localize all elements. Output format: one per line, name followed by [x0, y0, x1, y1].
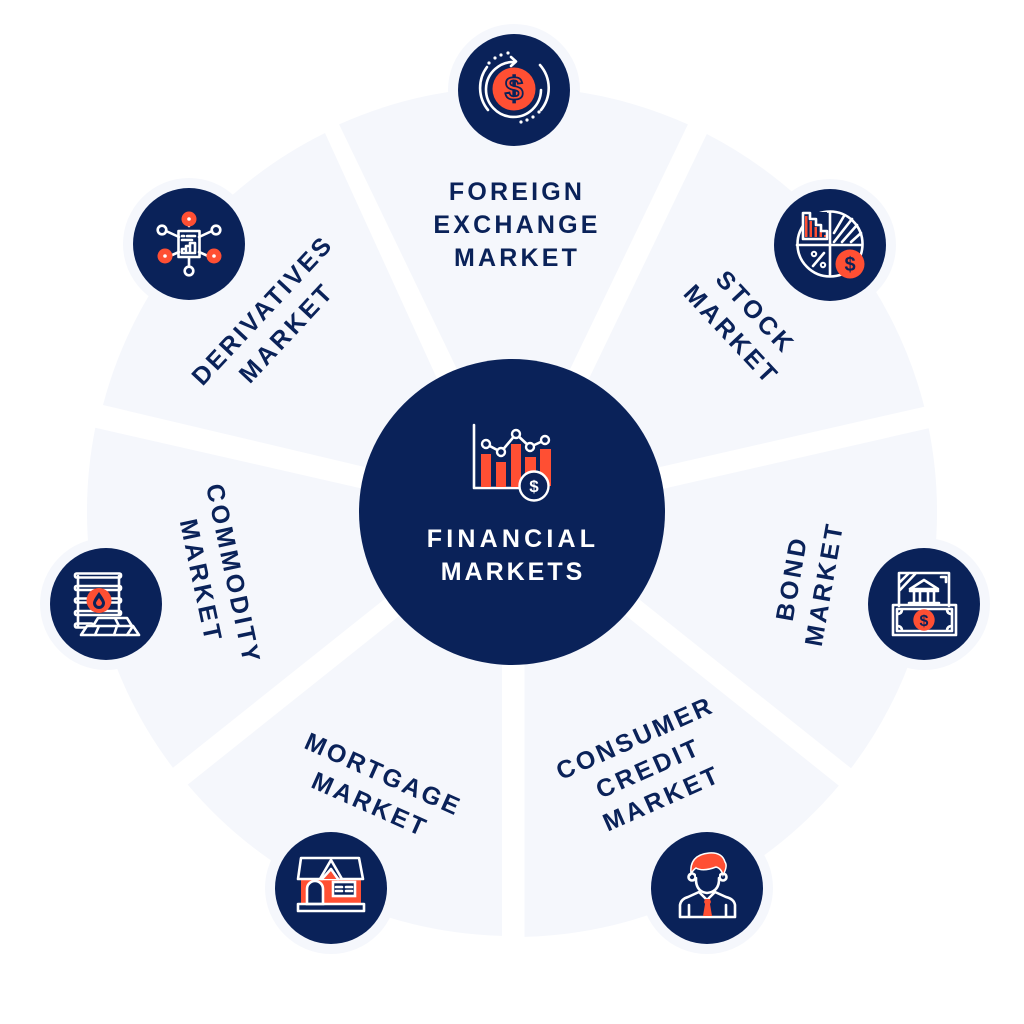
icon: stock market	[764, 179, 896, 311]
sector: stock market	[424, 111, 954, 633]
label: derivatives market: MARKET	[234, 277, 340, 389]
icon: derivatives	[123, 178, 255, 310]
sector: bond market	[498, 348, 965, 777]
label: commodity market: MARKET	[174, 517, 227, 646]
icon: stock market: $	[844, 254, 856, 276]
label: bond market: MARKET	[800, 519, 849, 648]
icon: mortgage	[265, 822, 397, 954]
label: foreign exchange market: EXCHANGE	[433, 211, 601, 239]
label: stock market	[678, 257, 809, 391]
label: mortgage market: MORTGAGE	[300, 728, 466, 822]
label: consumer credit market	[552, 691, 745, 846]
label: commodity market	[168, 481, 266, 674]
icon: bond market	[858, 538, 990, 670]
icon: foreign exchange	[448, 24, 580, 156]
label: consumer credit market: CONSUMER	[552, 691, 719, 786]
label: stock market: STOCK	[710, 265, 801, 360]
sector: foreign exchange market	[339, 87, 688, 487]
label: bond market	[767, 514, 849, 648]
center title	[427, 525, 599, 586]
icon: foreign exchange: $	[505, 70, 523, 107]
sector: consumer credit market	[367, 459, 855, 971]
label: consumer credit market: MARKET	[599, 760, 725, 837]
label: foreign exchange market: FOREIGN	[449, 178, 585, 206]
label: bond market: BOND	[771, 533, 813, 623]
center circle: financial markets	[359, 359, 665, 665]
sector: commodity market	[59, 347, 526, 776]
icon: consumer credit	[641, 822, 773, 954]
label: consumer credit market: CREDIT	[592, 733, 706, 804]
icon: chart with dollar coin	[474, 425, 551, 500]
icon: bond market: $	[920, 613, 929, 630]
center title: FINANCIAL	[427, 525, 599, 553]
label: foreign exchange market: MARKET	[454, 244, 580, 272]
icon: commodity	[40, 538, 172, 670]
label: mortgage market: MARKET	[307, 767, 432, 843]
sector: derivatives market	[103, 133, 491, 497]
icon: chart with dollar coin: $	[529, 477, 539, 496]
gold bars	[81, 618, 139, 635]
label: foreign exchange market	[433, 178, 601, 272]
label: commodity market: COMMODITY	[200, 481, 266, 667]
sector: mortgage market	[171, 458, 659, 970]
label: stock market: MARKET	[678, 279, 784, 391]
center title: MARKETS	[441, 558, 585, 586]
label: derivatives market: DERIVATIVES	[186, 230, 339, 391]
